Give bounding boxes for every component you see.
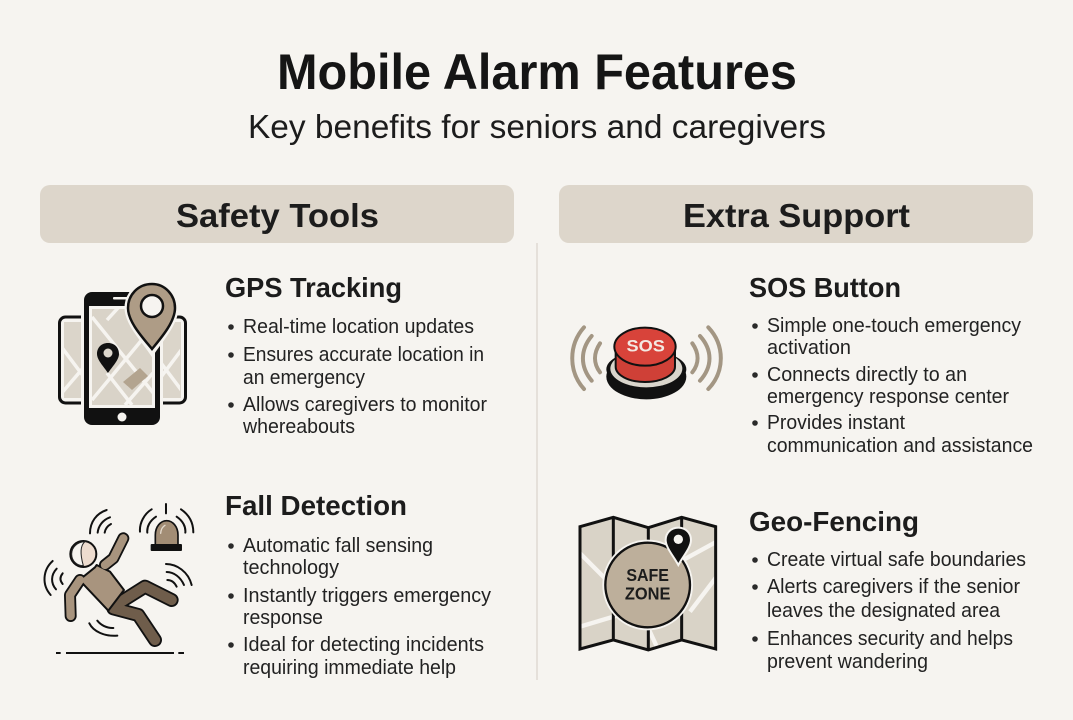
feature: gps tracking: GPS Tracking (225, 272, 402, 303)
feature: gps tracking: Allows caregivers to monitor (243, 394, 487, 416)
feature: gps tracking: an emergency (243, 367, 365, 389)
feature: gps tracking (225, 272, 487, 438)
icon: sos button (572, 327, 721, 399)
feature: sos button: Provides instant (767, 412, 905, 434)
icon: gps phone with map pins (60, 284, 186, 425)
icon: geo-fence safe zone map (580, 517, 717, 650)
icon: falling senior with alarm (44, 504, 193, 653)
feature: fall detection: technology (243, 557, 339, 579)
tan block (123, 368, 148, 390)
feature: gps tracking: whereabouts (242, 416, 355, 438)
feature: sos button: communication and assistance (767, 435, 1033, 457)
feature: sos button: SOS Button (749, 272, 901, 303)
alarm light (155, 521, 178, 545)
heading band: extra support (559, 185, 1033, 243)
icon: sos button: SOS (626, 337, 665, 356)
feature: fall detection: Automatic fall sensing (243, 535, 433, 557)
feature: geo-fencing: Enhances security and helps (767, 628, 1013, 650)
legs (113, 587, 172, 640)
heading band: safety tools (40, 185, 514, 243)
feature: sos button: emergency response center (767, 386, 1009, 408)
panel: safety tools (40, 185, 514, 679)
feature: fall detection (225, 490, 491, 679)
feature: fall detection: response (243, 607, 323, 629)
arms (70, 538, 123, 616)
feature: geo-fencing: Geo-Fencing (749, 506, 919, 537)
panel: extra support (559, 185, 1033, 673)
feature: gps tracking: Ensures accurate location in (243, 344, 484, 366)
icon: geo-fence safe zone map: SAFE (626, 565, 669, 585)
feature: sos button: Connects directly to an (767, 364, 967, 386)
feature: geo-fencing: leaves the designated area (767, 600, 1001, 622)
feature: fall detection: Instantly triggers emergency (243, 585, 491, 607)
feature: fall detection: Ideal for detecting incidents (243, 634, 484, 656)
feature: geo-fencing: prevent wandering (767, 651, 928, 673)
feature: sos button (749, 272, 1033, 457)
icon: geo-fence safe zone map: ZONE (625, 583, 670, 603)
feature: fall detection: requiring immediate help (243, 657, 456, 679)
subtitle: Key benefits for seniors and caregivers (248, 108, 826, 145)
feature: fall detection: Fall Detection (225, 490, 407, 521)
ground line (56, 650, 184, 656)
heading band: safety tools: Safety Tools (176, 197, 379, 234)
feature: geo-fencing (749, 506, 1026, 673)
feature: sos button: Simple one-touch emergency (767, 315, 1021, 337)
head (70, 541, 96, 567)
feature: gps tracking: Real-time location updates (243, 316, 474, 338)
feature: sos button: activation (767, 337, 851, 359)
heading band: extra support: Extra Support (683, 197, 910, 234)
title: Mobile Alarm Features (277, 44, 797, 100)
feature: geo-fencing: Create virtual safe boundaries (767, 549, 1026, 571)
feature: geo-fencing: Alerts caregivers if the senior (767, 576, 1020, 598)
